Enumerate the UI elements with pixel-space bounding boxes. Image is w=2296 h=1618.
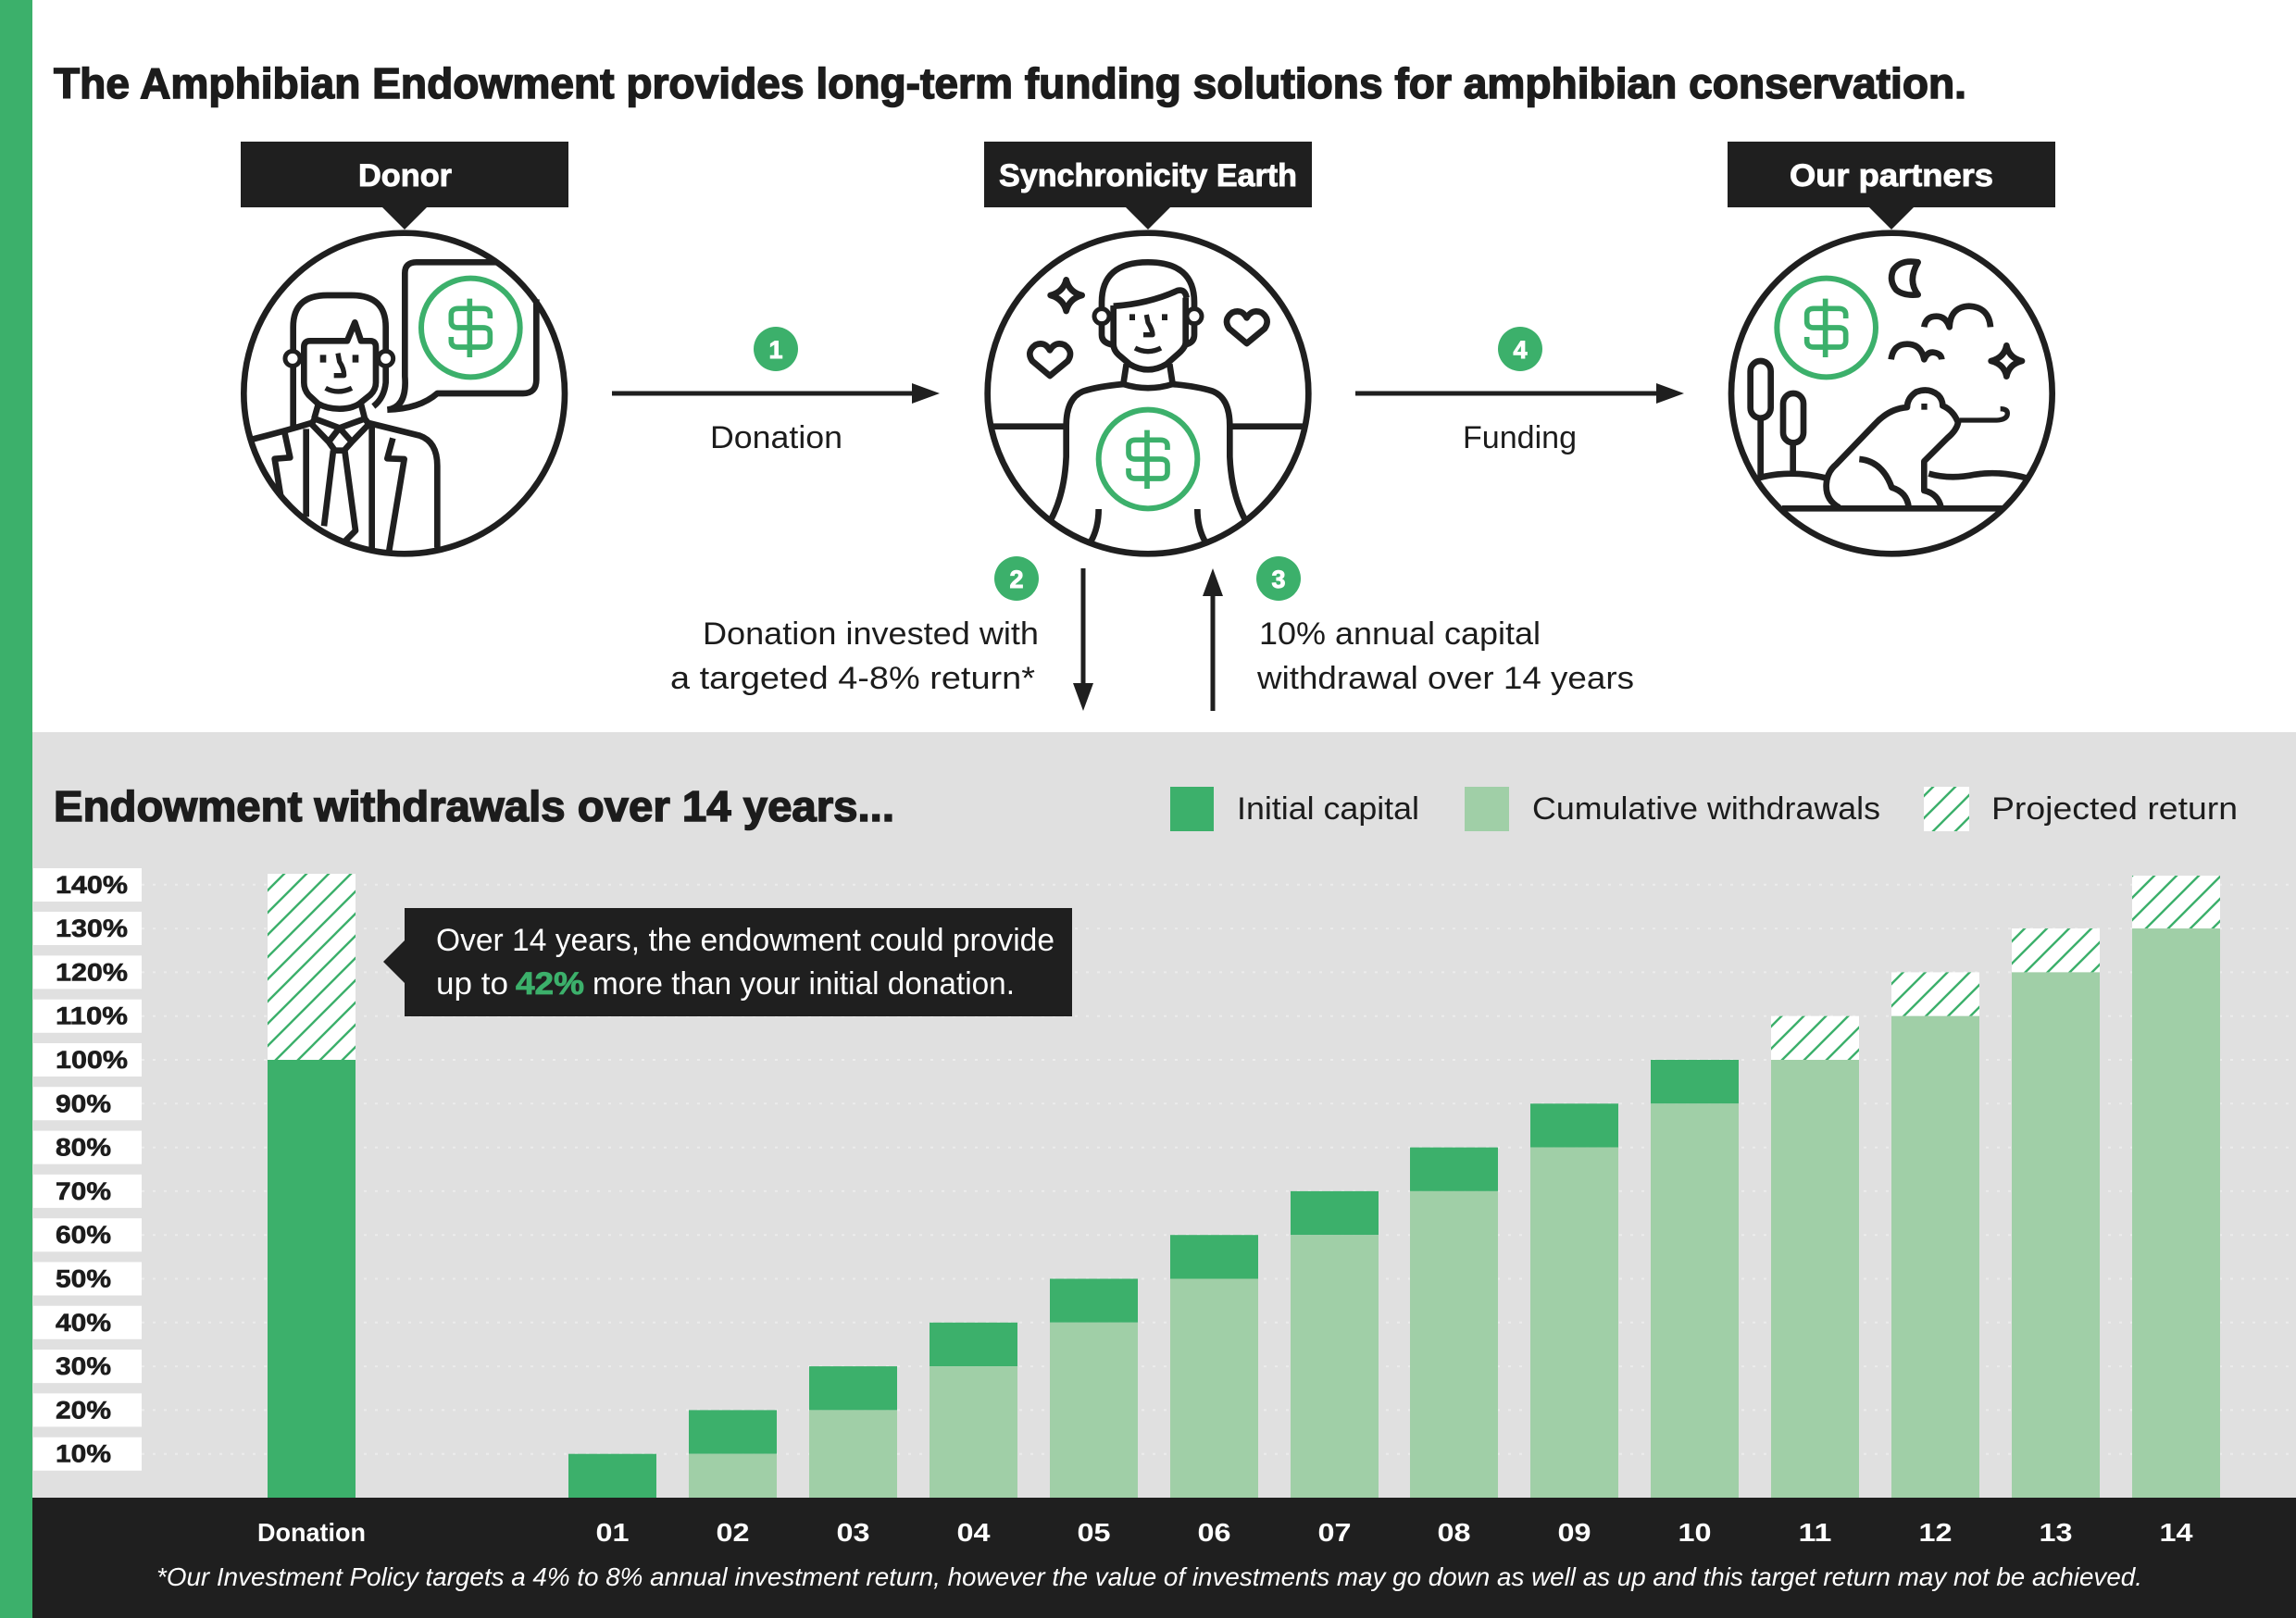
y axis labels: [33, 868, 142, 1471]
left green strip: [0, 0, 32, 1618]
bar: year 13: [2012, 928, 2100, 1498]
icon: donor with speech bubble: [243, 233, 565, 554]
label: our partners: Our partners: [1790, 158, 1993, 193]
legend: initial capital: Initial capital: [1237, 791, 1419, 827]
x axis labels: 06: [1198, 1518, 1231, 1547]
x axis labels: [257, 1518, 2193, 1547]
text: annual capital withdrawal: withdrawal over 14 years: [1256, 661, 1634, 696]
y axis labels: 120%: [56, 958, 128, 986]
label: donor: [241, 142, 568, 230]
x axis labels: 12: [1918, 1518, 1952, 1547]
panel: chart background: [32, 732, 2296, 1498]
x axis labels: 05: [1078, 1518, 1111, 1547]
callout: more than your initial donation.: [593, 966, 1015, 1002]
step 1 badge: [754, 327, 798, 371]
text: annual capital withdrawal: 10% annual capital: [1259, 616, 1541, 652]
text: donation invested: a targeted 4-8% return*: [670, 661, 1035, 696]
arrow: invested down: [1073, 568, 1093, 711]
bar chart: [33, 868, 2296, 1498]
chart heading: Endowment withdrawals over 14 years...: [54, 782, 894, 830]
bar: year 05: [1050, 1279, 1138, 1498]
step 4 badge: 4: [1513, 336, 1528, 364]
label: funding: Funding: [1463, 420, 1577, 455]
callout: Over 14 years, the endowment could provide: [436, 923, 1054, 958]
arrow: funding: [1355, 383, 1684, 404]
label: synchronicity earth: [984, 142, 1312, 230]
bar: year 02: [689, 1410, 777, 1498]
y axis labels: 80%: [56, 1134, 111, 1162]
y axis labels: 100%: [56, 1046, 128, 1074]
bar: year 09: [1530, 1103, 1618, 1498]
y axis labels: 140%: [56, 871, 128, 899]
x axis labels: 08: [1437, 1518, 1470, 1547]
bar: year 06: [1170, 1235, 1258, 1498]
bar: donation: [268, 874, 356, 1498]
arrow: donation: [612, 383, 940, 404]
label: synchronicity earth: Synchronicity Earth: [999, 158, 1297, 193]
x axis labels: 14: [2159, 1518, 2193, 1547]
text: donation invested: Donation invested with: [703, 616, 1039, 652]
y axis labels: 110%: [56, 1002, 128, 1030]
legend: cumulative withdrawals: [1465, 787, 1880, 831]
panel: our partners: [1728, 142, 2055, 554]
y axis labels: 30%: [56, 1352, 111, 1380]
bar: year 01: [568, 1454, 656, 1498]
bar: year 14: [2132, 876, 2220, 1498]
y axis labels: 20%: [56, 1396, 111, 1424]
step 3 badge: 3: [1271, 566, 1286, 593]
bar: year 04: [930, 1323, 1017, 1498]
x axis labels: Donation: [257, 1518, 366, 1547]
y axis labels: 130%: [56, 915, 128, 942]
x axis labels: 10: [1678, 1518, 1711, 1547]
step 3 badge: [1256, 556, 1301, 601]
label: our partners: [1728, 142, 2055, 230]
step 2 badge: 2: [1009, 566, 1024, 593]
text: annual capital withdrawal: [1256, 616, 1634, 696]
icon: frog in wetland: [1731, 233, 2053, 554]
callout: up to: [436, 966, 508, 1002]
bar: year 08: [1410, 1148, 1498, 1498]
x axis labels: 03: [837, 1518, 870, 1547]
y axis labels: 70%: [56, 1177, 111, 1205]
bar: year 07: [1291, 1191, 1379, 1498]
step 4 badge: [1498, 327, 1542, 371]
legend: projected return: Projected return: [1991, 791, 2238, 827]
x axis labels: 04: [957, 1518, 991, 1547]
panel: donor: [241, 142, 568, 554]
y axis labels: 50%: [56, 1264, 111, 1292]
legend: projected return: [1924, 787, 2238, 831]
panel: footer: [32, 1498, 2296, 1618]
panel: synchronicity earth: [984, 142, 1312, 554]
bar: year 10: [1651, 1060, 1739, 1498]
label: donor: Donor: [358, 158, 452, 193]
x axis labels: 01: [596, 1518, 630, 1547]
callout: 42%: [516, 966, 584, 1002]
y axis labels: 40%: [56, 1309, 111, 1337]
legend: [1170, 787, 2238, 831]
x axis labels: 13: [2039, 1518, 2072, 1547]
step 1 badge: 1: [768, 336, 783, 364]
arrow: withdrawal up: [1203, 568, 1223, 711]
label: donation: Donation: [710, 420, 842, 455]
icon: person with dollar on chest: [988, 233, 1308, 554]
title: The Amphibian Endowment provides long-term funding solutions for amphibian conservation.: [54, 59, 1966, 107]
x axis labels: 07: [1318, 1518, 1352, 1547]
y axis labels: 90%: [56, 1089, 111, 1117]
y axis labels: 60%: [56, 1221, 111, 1249]
bar: year 12: [1891, 972, 1979, 1498]
x axis labels: 09: [1557, 1518, 1591, 1547]
step 2 badge: [994, 556, 1039, 601]
bar: year 03: [809, 1366, 897, 1498]
legend: cumulative withdrawals: Cumulative withdrawals: [1532, 791, 1880, 827]
footnote: *Our Investment Policy targets a 4% to 8% annual investment return, however the value of investments may go down as well as up and this target return may not be achieved.: [156, 1562, 2142, 1591]
callout: [383, 908, 1072, 1016]
x axis labels: 02: [717, 1518, 750, 1547]
x axis labels: 11: [1798, 1518, 1831, 1547]
legend: initial capital: [1170, 787, 1419, 831]
text: donation invested: [670, 616, 1039, 696]
y axis labels: 10%: [56, 1440, 111, 1468]
bar: year 11: [1771, 1016, 1859, 1498]
